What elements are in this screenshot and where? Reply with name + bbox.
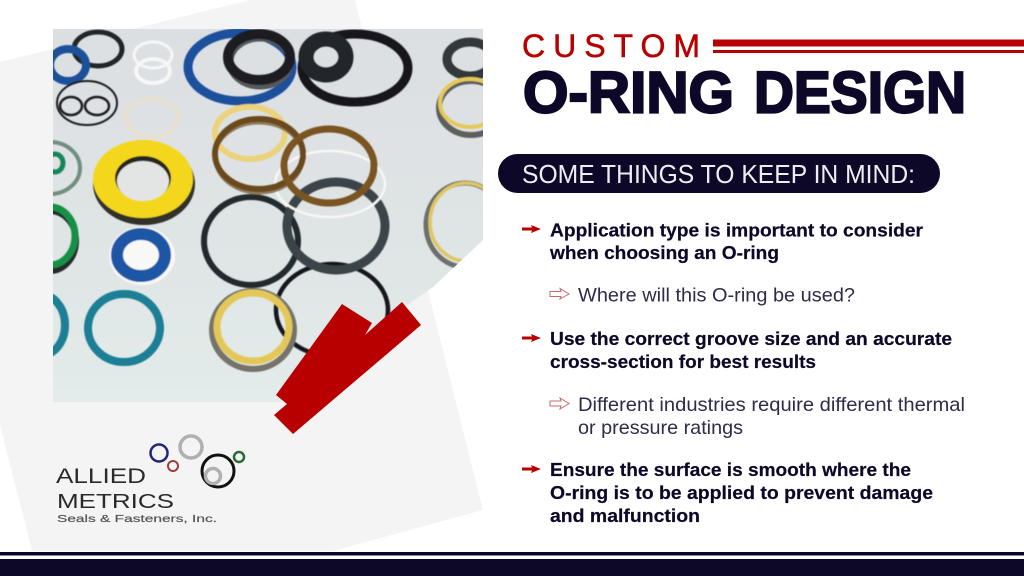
background grey panel: [0, 0, 483, 551]
icon: solid red arrow: [522, 225, 541, 233]
bullet 3: O-ring is to be applied to prevent damage: [550, 482, 933, 503]
company logo: [56, 436, 244, 525]
title: o-ring design: [523, 60, 966, 126]
subheading pill: SOME THINGS TO KEEP IN MIND:: [522, 159, 915, 189]
bullet 2: [522, 328, 952, 372]
icon: hollow arrow: [550, 288, 569, 299]
title: o-ring design: O-RING: [523, 60, 734, 126]
logo wordmark: [56, 464, 217, 525]
bullet 3: and malfunction: [550, 505, 700, 526]
title: custom: CUSTOM: [522, 28, 700, 64]
logo wordmark: Seals & Fasteners, Inc.: [57, 513, 217, 525]
title accent lines: [713, 40, 1024, 53]
bullet 2: Use the correct groove size and an accurate: [550, 328, 952, 349]
footer bar: [0, 552, 1024, 576]
icon: solid red arrow: [522, 465, 541, 473]
bullet 1: [522, 220, 923, 263]
title: o-ring design: DESIGN: [754, 60, 966, 126]
bullet 3: Ensure the surface is smooth where the: [550, 459, 911, 480]
sub-point 2: or pressure ratings: [578, 417, 743, 439]
logo rings: [150, 436, 244, 487]
bullet 1: when choosing an O-ring: [549, 242, 779, 263]
bullet 3: [522, 459, 933, 526]
photo of assorted O-rings: [53, 29, 483, 402]
icon: hollow arrow: [550, 398, 569, 409]
red angled accent shape: [274, 302, 421, 434]
sub-point 2: Different industries require different thermal: [578, 394, 965, 416]
sub-point 2: [550, 394, 965, 439]
logo wordmark: ALLIED: [56, 464, 146, 488]
bullet 2: cross-section for best results: [550, 351, 816, 372]
logo wordmark: METRICS: [57, 490, 174, 513]
icon: solid red arrow: [522, 334, 541, 342]
bullet 1: Application type is important to consider: [550, 220, 923, 240]
sub-point 1: Where will this O-ring be used?: [578, 284, 855, 306]
